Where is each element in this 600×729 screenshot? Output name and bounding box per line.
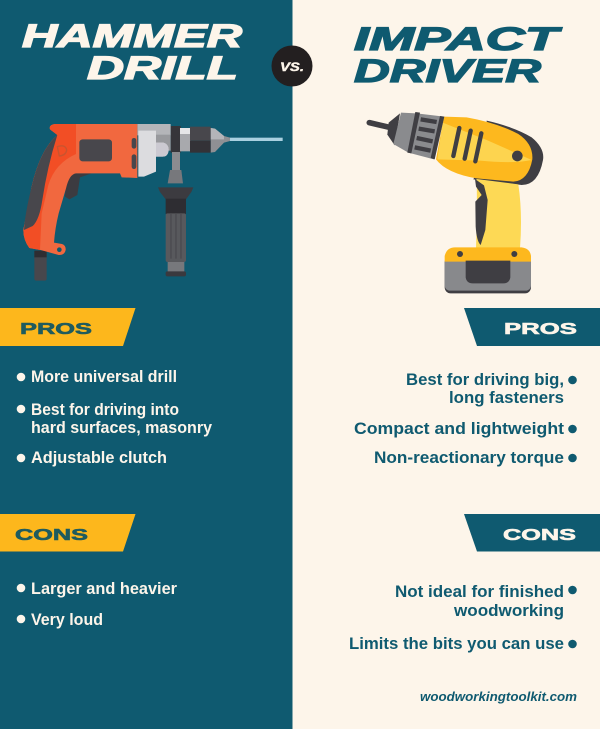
drill side handle — [158, 152, 193, 276]
banner: left pros: PROS — [20, 321, 92, 338]
list: hammer drill pros: hard surfaces, masonry — [31, 419, 213, 437]
title: impact driver: IMPACT — [354, 21, 562, 57]
list: impact driver pros: Compact and lightweight — [354, 420, 565, 438]
list: hammer drill cons: Larger and heavier — [31, 580, 178, 598]
banner: right cons — [464, 514, 600, 552]
list: hammer drill cons — [17, 580, 178, 629]
list: impact driver cons: Not ideal for finished — [395, 583, 564, 601]
banner: right pros — [464, 308, 600, 346]
banner: left cons: CONS — [15, 527, 88, 544]
banner: left pros — [0, 308, 136, 346]
list: impact driver pros: Non-reactionary torque — [374, 449, 564, 467]
list: impact driver pros — [354, 371, 577, 467]
panel: right background — [292, 0, 600, 729]
banner: right pros: PROS — [504, 321, 577, 338]
title: impact driver — [354, 21, 562, 89]
list: impact driver cons — [349, 583, 577, 653]
drill cord — [34, 251, 47, 281]
icon: hammer drill — [23, 124, 283, 281]
list: hammer drill pros: Best for driving into — [31, 401, 179, 419]
list: impact driver pros: Best for driving big, — [406, 371, 564, 389]
list: impact driver pros: long fasteners — [449, 389, 564, 407]
vs badge — [272, 46, 312, 86]
banner: left cons — [0, 514, 136, 552]
icon: impact driver — [369, 112, 543, 293]
title: hammer drill — [22, 18, 242, 86]
list: hammer drill cons: Very loud — [31, 611, 103, 629]
source url: woodworkingtoolkit.com — [420, 690, 577, 704]
panel: left background — [0, 0, 292, 729]
list: hammer drill pros — [17, 368, 213, 467]
title: hammer drill: DRILL — [87, 50, 238, 86]
title: impact driver: DRIVER — [354, 53, 541, 89]
list: impact driver cons: woodworking — [453, 602, 564, 620]
banner: right cons: CONS — [503, 527, 576, 544]
vs badge: VS. — [280, 60, 304, 74]
list: hammer drill pros: More universal drill — [31, 368, 177, 386]
list: hammer drill pros: Adjustable clutch — [31, 449, 167, 467]
title: hammer drill: HAMMER — [22, 18, 242, 54]
list: impact driver cons: Limits the bits you can use — [349, 635, 564, 653]
